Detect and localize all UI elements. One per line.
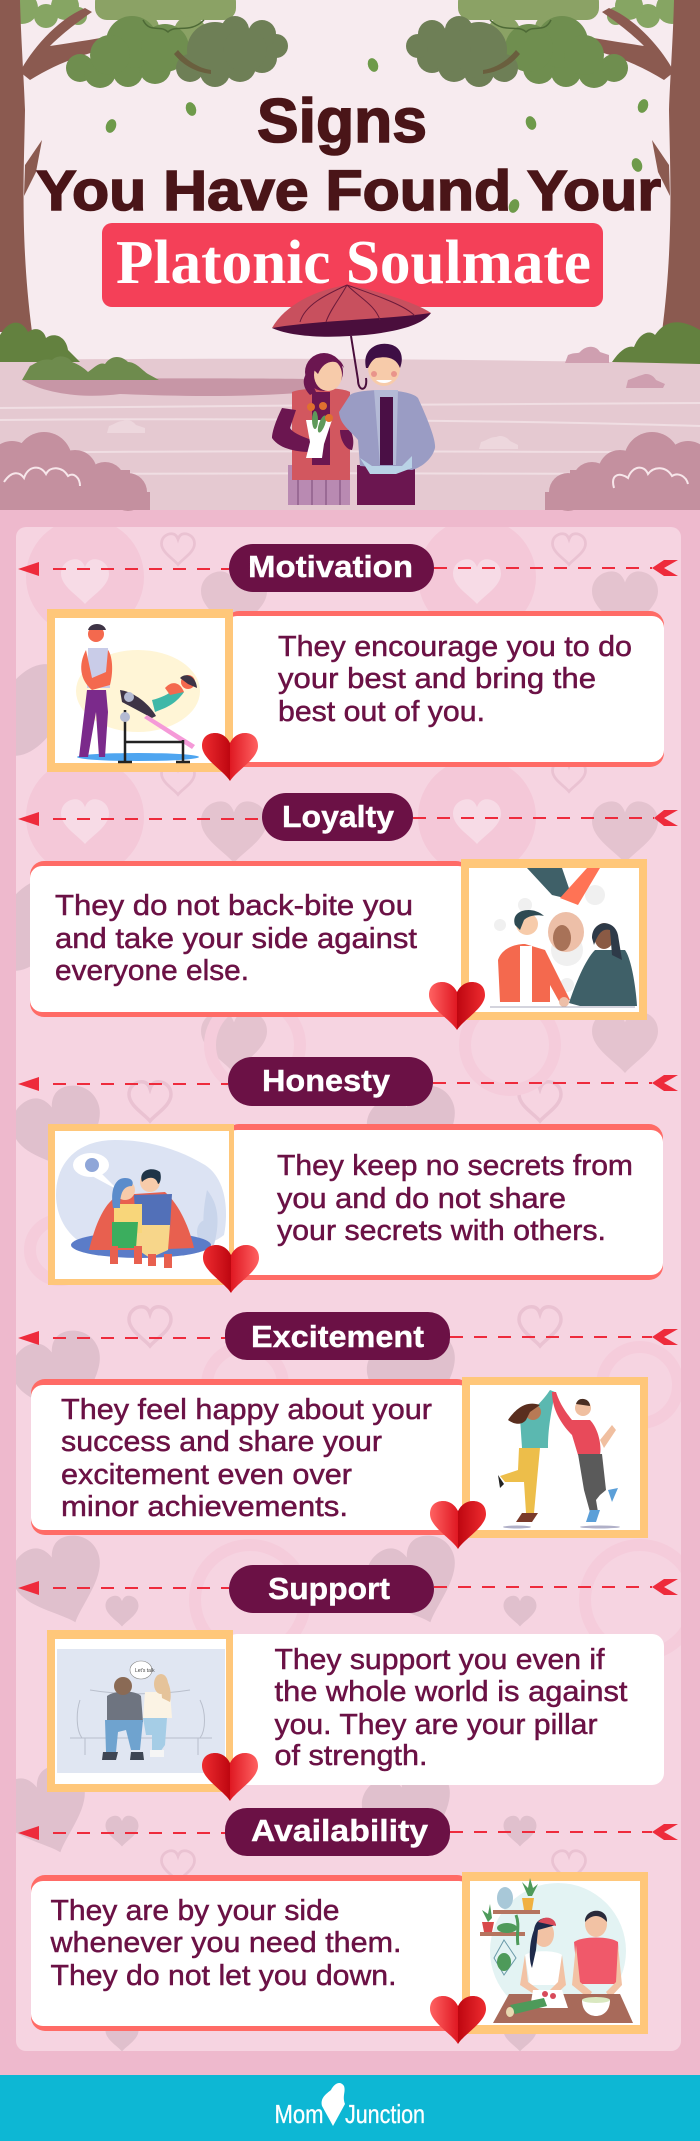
title: You Have Found Your (36, 159, 661, 223)
photo frame (462, 1377, 648, 1538)
icon: heart (429, 982, 485, 1030)
photo frame (48, 1124, 234, 1285)
heading pill: Availability (251, 1813, 429, 1848)
card text: the whole world is against (274, 1676, 628, 1708)
card text (277, 1150, 633, 1247)
heading pill: Excitement (251, 1319, 424, 1354)
main panel (0, 518, 695, 2052)
card text: you and do not share (277, 1183, 566, 1215)
icon: heart (202, 733, 258, 781)
card text: everyone else. (55, 955, 249, 987)
section: Support (18, 1565, 678, 1801)
divider arrow (18, 810, 678, 826)
icon: heart (430, 1996, 486, 2044)
card text (61, 1394, 432, 1523)
title (36, 87, 661, 223)
illustration: couple under blanket (56, 1140, 226, 1268)
section: Availability (18, 1808, 678, 2044)
heading pill (225, 1312, 450, 1360)
illustration: comforting friend on sofa: Let's talk (135, 1668, 155, 1674)
heading pill: Motivation (248, 549, 413, 584)
section: Excitement (18, 1312, 678, 1549)
card text: They are by your side (50, 1895, 340, 1927)
illustration: couple holding hands (490, 868, 637, 1007)
card text: you. They are your pillar (274, 1709, 598, 1741)
bushes pale (107, 420, 518, 449)
card text: They do not back-bite you (55, 890, 413, 922)
logo (274, 2083, 425, 2129)
illustration: couple cooking (480, 1878, 633, 2023)
heading pill (228, 1057, 433, 1106)
section: Honesty (18, 1057, 678, 1293)
divider arrow (18, 560, 678, 576)
card text: and take your side against (55, 923, 417, 955)
card text: whenever you need them. (49, 1927, 402, 1959)
title banner: Platonic Soulmate (116, 229, 591, 297)
heading pill (229, 544, 434, 592)
divider arrow (18, 1075, 678, 1091)
card text: They encourage you to do (278, 631, 632, 663)
heading pill: Honesty (262, 1063, 391, 1098)
card text: minor achievements. (61, 1491, 348, 1523)
card text: success and share your (61, 1426, 382, 1458)
bushes mauve small (565, 347, 665, 388)
tree left (0, 0, 288, 332)
heading pill (225, 1808, 450, 1856)
section: Loyalty (18, 793, 678, 1030)
footer bar (0, 2075, 700, 2141)
bushes green (0, 322, 700, 364)
card text: best out of you. (278, 696, 485, 728)
card (31, 1875, 471, 2031)
card text (274, 1644, 628, 1772)
umbrella (272, 285, 431, 328)
card text: of strength. (274, 1740, 428, 1772)
heading pill (229, 1565, 434, 1613)
logo: Junction (345, 2099, 425, 2129)
card (30, 861, 470, 1017)
card text: your best and bring the (278, 663, 596, 695)
woman (288, 465, 350, 505)
divider arrow (18, 1824, 678, 1840)
card text: excitement even over (61, 1459, 352, 1491)
ground lines (0, 403, 700, 474)
divider arrow (18, 1579, 678, 1595)
card text (49, 1895, 402, 1992)
photo frame (47, 1630, 233, 1792)
card text (278, 631, 632, 728)
illustration: comforting friend on sofa (57, 1649, 225, 1773)
section: Motivation (18, 544, 678, 781)
photo frame (47, 609, 233, 772)
pond (22, 378, 312, 396)
card text: your secrets with others. (277, 1215, 606, 1247)
man (357, 465, 415, 505)
illustration: high five (498, 1390, 620, 1528)
logo: Mom (274, 2099, 324, 2129)
ground (0, 359, 700, 510)
card (225, 611, 664, 767)
card text (55, 890, 417, 987)
photo frame (461, 859, 647, 1020)
icon: heart (430, 1501, 486, 1549)
illustration: trainer and sit-up bench (76, 624, 200, 762)
card text: They keep no secrets from (277, 1150, 633, 1182)
bush big left (0, 432, 150, 511)
card text: They do not let you down. (50, 1960, 396, 1992)
icon: heart (202, 1753, 258, 1801)
card (225, 1124, 663, 1280)
icon: heart (203, 1245, 259, 1293)
couple with umbrella (272, 285, 435, 505)
photo frame (462, 1872, 648, 2034)
tree right (406, 0, 700, 332)
header scene (0, 0, 700, 511)
card (31, 1379, 471, 1535)
bush big right (545, 432, 700, 511)
card text: They support you even if (274, 1644, 605, 1676)
card text: They feel happy about your (61, 1394, 432, 1426)
heading pill: Support (268, 1571, 390, 1606)
heading pill: Loyalty (282, 799, 395, 834)
heading pill (262, 793, 413, 841)
bouquet (306, 420, 332, 458)
divider arrow (18, 1329, 678, 1345)
card (225, 1634, 664, 1785)
falling leaves (104, 57, 650, 214)
title: Signs (257, 87, 427, 156)
background heart pattern (0, 518, 695, 2052)
